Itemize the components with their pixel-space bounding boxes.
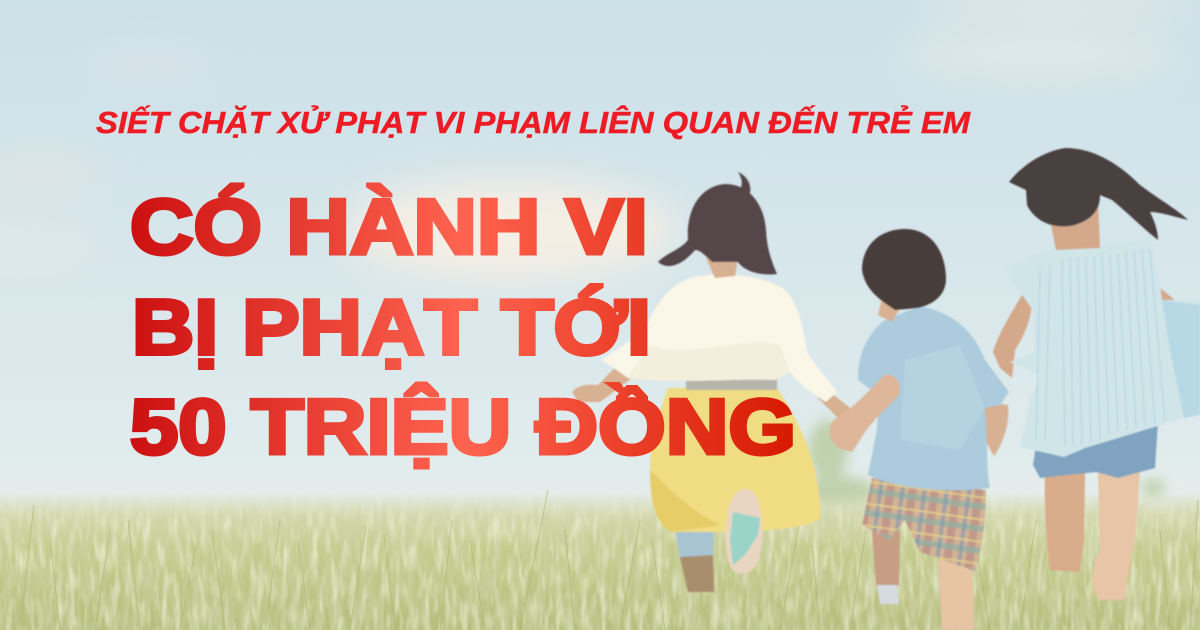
child: boy xyxy=(830,229,1009,630)
child: left girl xyxy=(572,172,852,592)
subtitle: SIẾT CHẶT XỬ PHẠT VI PHẠM LIÊN QUAN ĐẾN TRẺ EM xyxy=(96,104,971,140)
neck xyxy=(878,298,900,322)
background: clouds xyxy=(0,0,1200,280)
legs xyxy=(872,530,900,587)
title line 2: BỊ PHẠT TỚI xyxy=(132,283,651,371)
arm xyxy=(993,295,1032,378)
background: grass field xyxy=(0,490,1200,630)
title line 1: CÓ HÀNH VI xyxy=(130,182,648,270)
hair xyxy=(658,184,777,274)
arm right xyxy=(818,388,852,428)
main title xyxy=(130,182,796,470)
skirt xyxy=(650,387,820,532)
shirt xyxy=(858,306,1009,490)
background: distant trees xyxy=(804,420,1165,508)
hair xyxy=(862,229,946,310)
legs xyxy=(1045,472,1085,572)
far arm xyxy=(985,402,1008,456)
shoe xyxy=(726,489,762,574)
arm left xyxy=(572,352,640,402)
neck xyxy=(1046,200,1100,250)
child: right girl xyxy=(993,148,1200,600)
title line 3: 50 TRIỆU ĐỒNG xyxy=(130,382,796,470)
legs xyxy=(674,518,714,558)
arm xyxy=(830,375,900,452)
dress xyxy=(1005,240,1200,457)
shorts xyxy=(862,478,986,571)
hair xyxy=(1009,148,1188,240)
neck xyxy=(706,258,738,278)
waistband xyxy=(686,377,777,390)
shorts xyxy=(1033,420,1158,478)
children photo group xyxy=(572,148,1200,630)
blouse xyxy=(602,274,837,402)
